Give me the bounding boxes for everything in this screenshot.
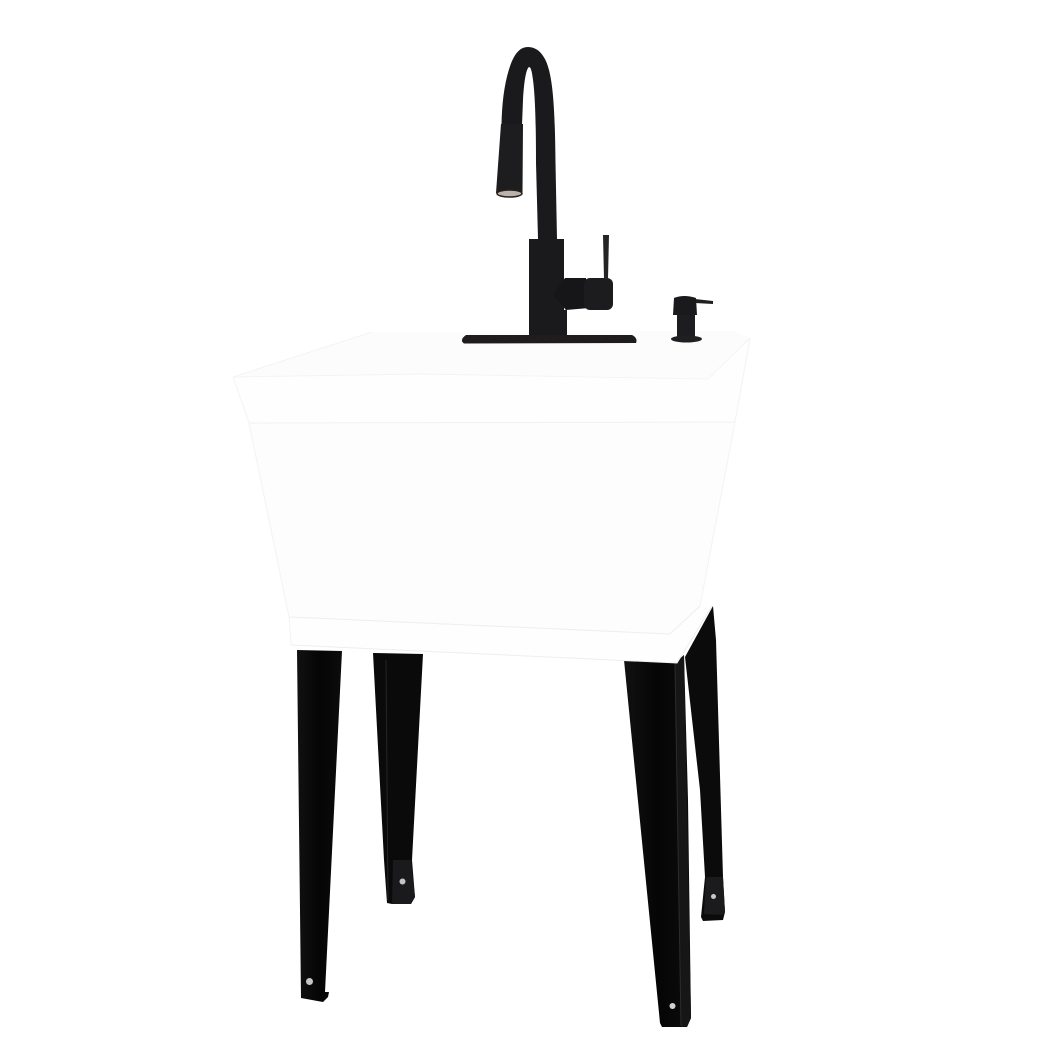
- faucet handle cap: [584, 278, 613, 310]
- tub basin interior and deck: [233, 331, 750, 400]
- soap pump nozzle: [695, 299, 713, 304]
- front left leg: [297, 650, 342, 1002]
- sink tub: [233, 331, 750, 663]
- faucet aerator: [497, 190, 522, 197]
- tub body: [249, 422, 735, 640]
- front right leg: [624, 655, 691, 1027]
- rear left leg: [373, 653, 423, 904]
- faucet deck plate: [462, 335, 636, 344]
- faucet handle connector: [553, 278, 589, 310]
- tub bottom skirt: [289, 606, 712, 663]
- soap dispenser: [671, 296, 713, 342]
- tub front rim: [233, 338, 750, 423]
- faucet lever: [603, 235, 609, 279]
- faucet: [462, 47, 636, 344]
- soap pump base: [671, 336, 702, 342]
- rear right leg: [685, 606, 725, 921]
- faucet gooseneck: [502, 47, 557, 239]
- faucet spray head: [496, 124, 523, 193]
- faucet body: [529, 239, 567, 335]
- soap pump head: [673, 296, 697, 315]
- soap pump stem: [677, 315, 695, 337]
